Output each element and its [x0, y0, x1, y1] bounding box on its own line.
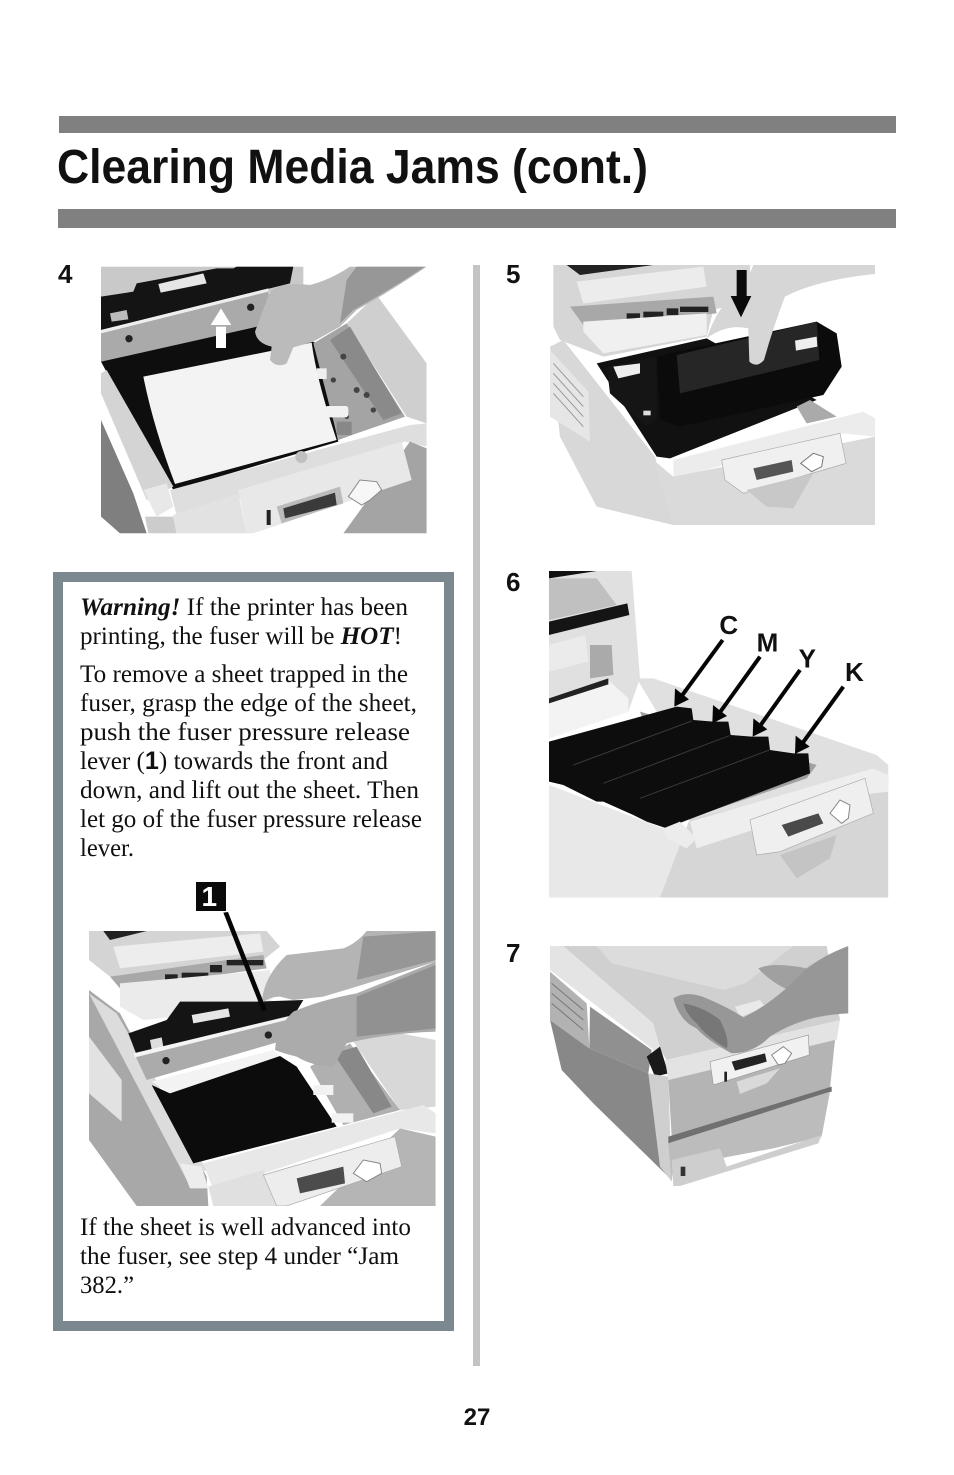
step number 4: 4 [58, 259, 73, 289]
photo: inserting image drum with down arrow [549, 265, 875, 525]
instructions text: lever (1) towards the front and [80, 747, 388, 775]
step number 5: 5 [506, 259, 520, 289]
instructions text: let go of the fuser pressure release [80, 806, 422, 833]
follow-up text: 382.” [80, 1272, 134, 1299]
label Y: Y [799, 644, 816, 674]
instructions text: down, and lift out the sheet. Then [80, 777, 419, 804]
column divider [473, 265, 480, 1366]
warning text: Warning! If the printer has been [80, 594, 408, 621]
photo: fuser pressure release lever with callout 1 [89, 881, 436, 1206]
instructions text [80, 661, 422, 862]
instructions text: To remove a sheet trapped in the [80, 661, 408, 688]
label K: K [845, 657, 864, 687]
photo: toner cartridges with C M Y K arrows [549, 571, 888, 898]
warning text [80, 594, 408, 650]
photo: closing printer cover with hand [550, 946, 848, 1188]
follow-up text: If the sheet is well advanced into [80, 1214, 411, 1241]
callout 1: 1 [202, 881, 217, 912]
page number: 27 [464, 1404, 490, 1431]
warning text: printing, the fuser will be HOT! [80, 623, 402, 650]
follow-up text [80, 1214, 411, 1299]
header band: bottom rule [58, 209, 896, 228]
instructions text: fuser, grasp the edge of the sheet, [80, 690, 417, 717]
arrow C [674, 640, 723, 707]
label M: M [757, 628, 778, 658]
photo: pulling sheet from printer with up arrow [101, 267, 427, 533]
step number 7: 7 [506, 938, 520, 968]
instructions text: lever. [80, 835, 134, 862]
arrow M [712, 657, 760, 723]
callout 1 leader [223, 912, 267, 1011]
callout 1 [196, 881, 226, 912]
arrow K [795, 687, 843, 754]
follow-up text: the fuser, see step 4 under “Jam [80, 1243, 400, 1270]
step number 6: 6 [506, 567, 520, 597]
arrow Y [753, 670, 800, 737]
header band: top rule [59, 116, 896, 133]
label C: C [719, 610, 738, 640]
warning panel [58, 577, 449, 1326]
instructions text: push the fuser pressure release [80, 719, 410, 746]
title: Clearing Media Jams (cont.) [57, 141, 648, 194]
